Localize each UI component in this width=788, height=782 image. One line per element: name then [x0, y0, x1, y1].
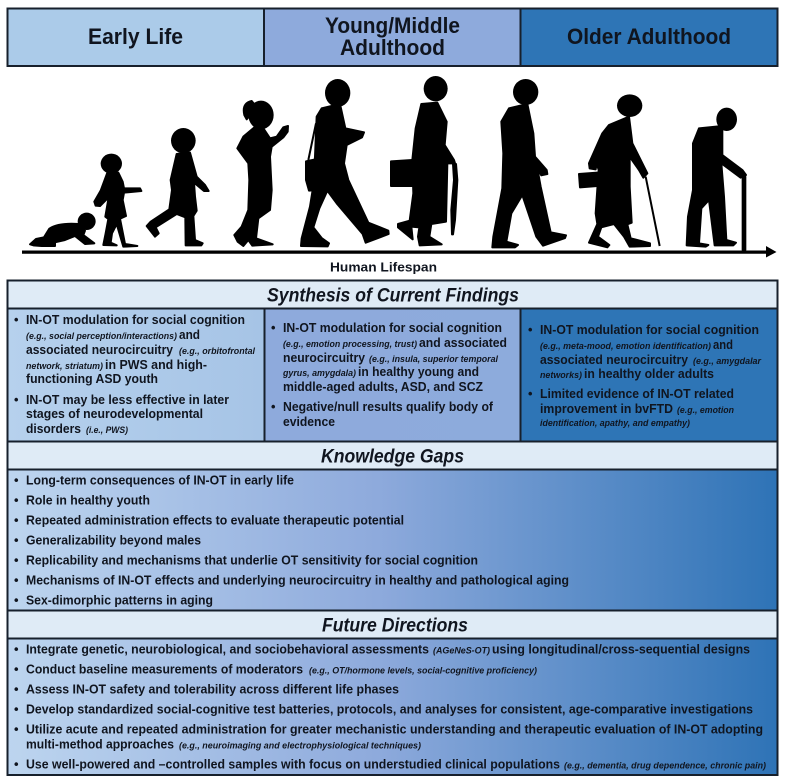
- column: older adulthood findings: networks): [540, 370, 582, 381]
- list: knowledge gaps: Sex-dimorphic patterns in aging: [26, 592, 213, 608]
- list: knowledge gaps: Repeated administration effects to evaluate therapeutic potential: [26, 512, 404, 528]
- column: early life findings: •: [14, 392, 19, 407]
- list: knowledge gaps: [14, 472, 569, 608]
- list: knowledge gaps: •: [14, 572, 19, 588]
- list: knowledge gaps: •: [14, 552, 19, 568]
- icon: walking boy: [147, 128, 209, 245]
- list: knowledge gaps: Long-term consequences of IN-OT in early life: [26, 472, 294, 488]
- heading: older adulthood: Older Adulthood: [567, 24, 731, 49]
- column: early life findings: (e.g., orbitofrontal: [179, 346, 255, 357]
- heading: early life: Early Life: [88, 24, 183, 49]
- column: early life findings: IN-OT modulation for social cognition: [26, 312, 245, 327]
- column: older adulthood findings: Limited evidence of IN-OT related: [540, 386, 734, 401]
- column: older adulthood findings: •: [528, 386, 533, 401]
- column: early life findings: network, striatum): [26, 361, 103, 372]
- column: early life findings: stages of neurodevelopmental: [26, 406, 203, 421]
- column: early life findings: •: [14, 312, 19, 327]
- heading bar: future directions: [8, 610, 778, 638]
- heading: young/middle adulthood: [325, 13, 460, 60]
- column: older adulthood findings: in healthy older adults: [584, 366, 714, 381]
- column: young and middle adulthood findings: (e.g., insula, superior temporal: [369, 354, 498, 365]
- heading bar: knowledge gaps: Knowledge Gaps: [321, 446, 464, 468]
- list: future directions: •: [14, 642, 19, 656]
- panel: synthesis of current findings: [8, 280, 778, 442]
- column: young and middle adulthood findings: Negative/null results qualify body of: [283, 399, 494, 414]
- column: older adulthood findings: •: [528, 322, 533, 337]
- column: young and middle adulthood findings: middle-aged adults, ASD, and SCZ: [283, 379, 483, 394]
- column: older adulthood findings: (e.g., meta-mood, emotion identification): [540, 341, 711, 352]
- icon: older woman with handbag and cane: [579, 94, 660, 247]
- list: knowledge gaps: Role in healthy youth: [26, 492, 150, 508]
- list: future directions: multi-method approaches: [26, 736, 174, 752]
- column: young and middle adulthood findings: and associated: [419, 335, 507, 350]
- list: knowledge gaps: •: [14, 472, 19, 488]
- column: young and middle adulthood findings: neurocircuitry: [283, 350, 366, 365]
- column: young and middle adulthood findings: in healthy young and: [358, 364, 479, 379]
- list: future directions: Assess IN-OT safety and tolerability across different life phases: [26, 682, 399, 696]
- list: knowledge gaps: Replicability and mechanisms that underlie OT sensitivity for social cognition: [26, 552, 478, 568]
- lifespan silhouettes: [30, 76, 746, 250]
- icon: young man with shoulder bag: [301, 79, 389, 246]
- life stage header band: [8, 8, 778, 66]
- list: future directions: •: [14, 702, 19, 716]
- icon: toddler girl: [94, 154, 141, 247]
- icon: crawling baby: [30, 213, 96, 246]
- column: young and middle adulthood findings: IN-OT modulation for social cognition: [283, 320, 502, 335]
- column: early life findings: in PWS and high-: [105, 357, 207, 372]
- heading bar: future directions: Future Directions: [322, 616, 468, 636]
- column: older adulthood findings: (e.g., amygdalar: [693, 356, 762, 367]
- list: future directions: (e.g., OT/hormone levels, social-cognitive proficiency): [309, 666, 537, 676]
- list: knowledge gaps: •: [14, 592, 19, 608]
- list: knowledge gaps: •: [14, 532, 19, 548]
- list: future directions: •: [14, 756, 19, 772]
- heading bar: synthesis: Synthesis of Current Findings: [267, 286, 519, 306]
- column: older adulthood findings: identification, apathy, and empathy): [540, 418, 690, 429]
- column: older adulthood findings: [520, 308, 778, 442]
- list: knowledge gaps: Mechanisms of IN-OT effects and underlying neurocircuitry in healthy and pathological aging: [26, 572, 569, 588]
- column: young and middle adulthood findings: evidence: [283, 414, 335, 429]
- list: future directions: [14, 642, 766, 772]
- column: early life findings: disorders: [26, 421, 81, 436]
- column: young and middle adulthood findings: [264, 308, 520, 442]
- list: future directions: Use well-powered and –controlled samples with focus on understudied clinical populations: [26, 756, 560, 772]
- column: older adulthood findings: IN-OT modulation for social cognition: [540, 322, 759, 337]
- axis label: Human Lifespan: [330, 260, 437, 274]
- list: knowledge gaps: Generalizability beyond males: [26, 532, 201, 548]
- list: future directions: Conduct baseline measurements of moderators: [26, 662, 303, 676]
- list: future directions: Integrate genetic, neurobiological, and sociobehavioral assessments: [26, 642, 429, 656]
- column: young and middle adulthood findings: (e.g., emotion processing, trust): [283, 339, 417, 350]
- panel: knowledge gaps: [8, 442, 778, 610]
- list: future directions: •: [14, 722, 19, 736]
- icon: elderly man with cane: [687, 108, 746, 250]
- heading bar: knowledge gaps: [8, 442, 778, 470]
- list: future directions: (AGeNeS-OT): [433, 646, 490, 656]
- column: older adulthood findings: associated neurocircuitry: [540, 352, 689, 367]
- column: early life findings: functioning ASD youth: [26, 371, 158, 386]
- column: young and middle adulthood findings: •: [271, 320, 276, 335]
- column: early life findings: [8, 308, 264, 442]
- column: older adulthood findings: and: [713, 337, 733, 352]
- panel: future directions: [8, 610, 778, 775]
- column: early life findings: (i.e., PWS): [86, 425, 128, 436]
- column: young and middle adulthood findings: gyrus, amygdala): [282, 368, 356, 379]
- column: early life findings: (e.g., social perception/interactions): [26, 331, 177, 342]
- column: older adulthood findings: improvement in bvFTD: [540, 401, 673, 416]
- list: future directions: Utilize acute and repeated administration for greater mechanistic understanding and therapeutic evaluation of IN-OT adopting: [26, 722, 763, 736]
- heading: young/middle adulthood: Adulthood: [340, 35, 445, 60]
- list: future directions: Develop standardized social-cognitive test batteries, protocols, and analyses for consistent, age-comparative investigations: [26, 702, 753, 716]
- column: older adulthood findings: (e.g., emotion: [677, 405, 734, 416]
- heading: young/middle adulthood: Young/Middle: [325, 13, 460, 38]
- icon: middle-aged man: [492, 79, 566, 247]
- list: future directions: •: [14, 662, 19, 676]
- list: future directions: •: [14, 682, 19, 696]
- icon: teen girl with ponytail: [234, 101, 288, 246]
- icon: adult woman with umbrella: [391, 76, 457, 245]
- list: future directions: using longitudinal/cross-sequential designs: [492, 642, 750, 656]
- heading bar: synthesis: [8, 280, 778, 308]
- arrow: human lifespan axis: [22, 246, 776, 258]
- column: early life findings: and: [179, 327, 200, 342]
- list: knowledge gaps: •: [14, 492, 19, 508]
- list: knowledge gaps: •: [14, 512, 19, 528]
- column: young and middle adulthood findings: •: [271, 399, 276, 414]
- list: future directions: (e.g., dementia, drug dependence, chronic pain): [564, 760, 766, 770]
- column: early life findings: associated neurocircuitry: [26, 342, 174, 357]
- column: early life findings: IN-OT may be less effective in later: [26, 392, 229, 407]
- list: future directions: (e.g., neuroimaging and electrophysiological techniques): [179, 740, 421, 750]
